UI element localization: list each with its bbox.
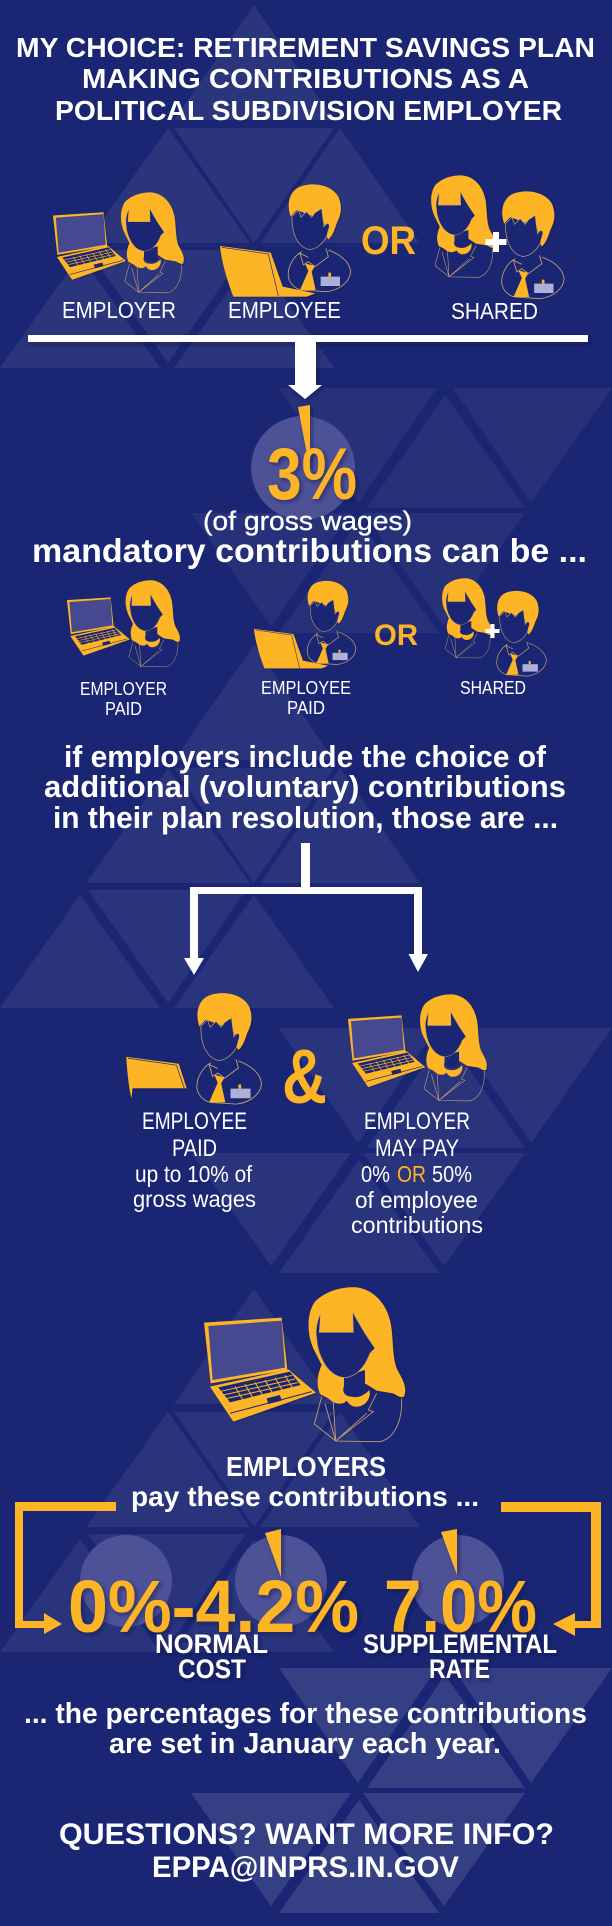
text: employee paid details: gross wages: [133, 1186, 256, 1212]
panel: voluntary payers: [126, 993, 487, 1238]
arrow: branching arrows: [184, 843, 428, 975]
pie: 4.2 percent: [235, 1529, 327, 1627]
label: employer: EMPLOYER: [62, 297, 176, 323]
pie chart: 3 percent: 3%: [267, 434, 357, 515]
OR label: OR: [374, 619, 418, 652]
rate: supplemental: 7.0%: [384, 1565, 537, 1648]
icon: shared employer and employee: [431, 175, 564, 299]
text: employer may pay details: OR: [397, 1161, 426, 1187]
text: employer may pay details: EMPLOYER: [364, 1108, 470, 1135]
panel: who can pay: [53, 175, 564, 324]
label: employer paid: EMPLOYER: [80, 679, 167, 699]
text: employer may pay details: MAY PAY: [375, 1135, 459, 1162]
arrow: bar and down arrow: [28, 335, 588, 399]
text: employee paid details: up to 10% of: [135, 1161, 253, 1187]
rate: normal cost range: 0%-4.2%: [68, 1565, 359, 1648]
pie charts and rates: [68, 1529, 557, 1684]
icon: employee with laptop: [220, 184, 351, 297]
icon: employer paid: [67, 580, 180, 667]
heading: employers: EMPLOYERS: [226, 1451, 386, 1482]
text: employer may pay details: of employee: [355, 1187, 478, 1213]
text: of gross wages: (of gross wages): [203, 506, 412, 536]
title: [16, 32, 595, 126]
icon: employee paid: [254, 581, 356, 668]
label: supplemental rate: RATE: [429, 1654, 490, 1684]
text: pay these contributions: pay these contributions ...: [131, 1481, 479, 1512]
icon: shared: [442, 578, 546, 676]
icon: employer with laptop: [53, 192, 184, 293]
text: voluntary contributions: [44, 739, 566, 835]
label: supplemental rate: SUPPLEMENTAL: [363, 1629, 557, 1659]
text: voluntary contributions: if employers include the choice of: [64, 739, 547, 774]
text: employer may pay details: 50%: [432, 1161, 472, 1187]
arrow: right bracket: [501, 1502, 601, 1636]
label: employee paid: [261, 678, 351, 718]
label: normal cost: [155, 1629, 268, 1684]
label: normal cost: NORMAL: [155, 1629, 268, 1659]
label: shared: SHARED: [451, 298, 538, 324]
text: employee paid details: [133, 1108, 256, 1212]
text: employer may pay details: contributions: [351, 1212, 483, 1238]
icon: employee paid large: [126, 993, 262, 1104]
title: POLITICAL SUBDIVISION EMPLOYER: [55, 95, 562, 126]
ampersand: &: [282, 1034, 327, 1120]
title: MY CHOICE: RETIREMENT SAVINGS PLAN: [16, 32, 595, 63]
label: employee paid: EMPLOYEE: [261, 678, 351, 698]
label: employee paid: PAID: [287, 698, 325, 718]
label: employee: EMPLOYEE: [228, 297, 341, 323]
title: MAKING CONTRIBUTIONS AS A: [82, 63, 529, 94]
label: employer paid: [80, 679, 167, 719]
label: supplemental rate: [363, 1629, 557, 1684]
pie: 7 percent: [412, 1529, 504, 1627]
text: employer may pay details: 0%: [361, 1161, 390, 1187]
label: shared: SHARED: [460, 678, 526, 698]
text: employee paid details: EMPLOYEE: [142, 1108, 247, 1135]
panel: mandatory payers: [67, 578, 546, 719]
pie: zero percent: [80, 1535, 172, 1627]
footer contact: QUESTIONS? WANT MORE INFO?: [59, 1818, 554, 1851]
label: normal cost: COST: [178, 1654, 246, 1684]
OR label: OR: [361, 219, 416, 263]
footer contact: [59, 1818, 554, 1884]
text: percentages note: ... the percentages for these contributions: [24, 1698, 587, 1730]
text: percentages note: are set in January each year.: [109, 1728, 501, 1760]
text: voluntary contributions: in their plan resolution, those are ...: [53, 800, 558, 835]
text: percentages note: [24, 1698, 587, 1760]
text: voluntary contributions: additional (voluntary) contributions: [44, 769, 566, 804]
icon: employer large: [348, 994, 487, 1101]
text: employer may pay details: [351, 1108, 483, 1238]
text: employee paid details: PAID: [172, 1135, 217, 1162]
arrow: left bracket: [15, 1502, 116, 1634]
pie chart: 3 percent: [251, 405, 357, 520]
label: employer paid: PAID: [105, 699, 142, 719]
heading: mandatory contributions: mandatory contributions can be ...: [32, 532, 587, 569]
footer contact: EPPA@INPRS.IN.GOV: [152, 1851, 459, 1884]
icon: employer big: [204, 1287, 405, 1442]
